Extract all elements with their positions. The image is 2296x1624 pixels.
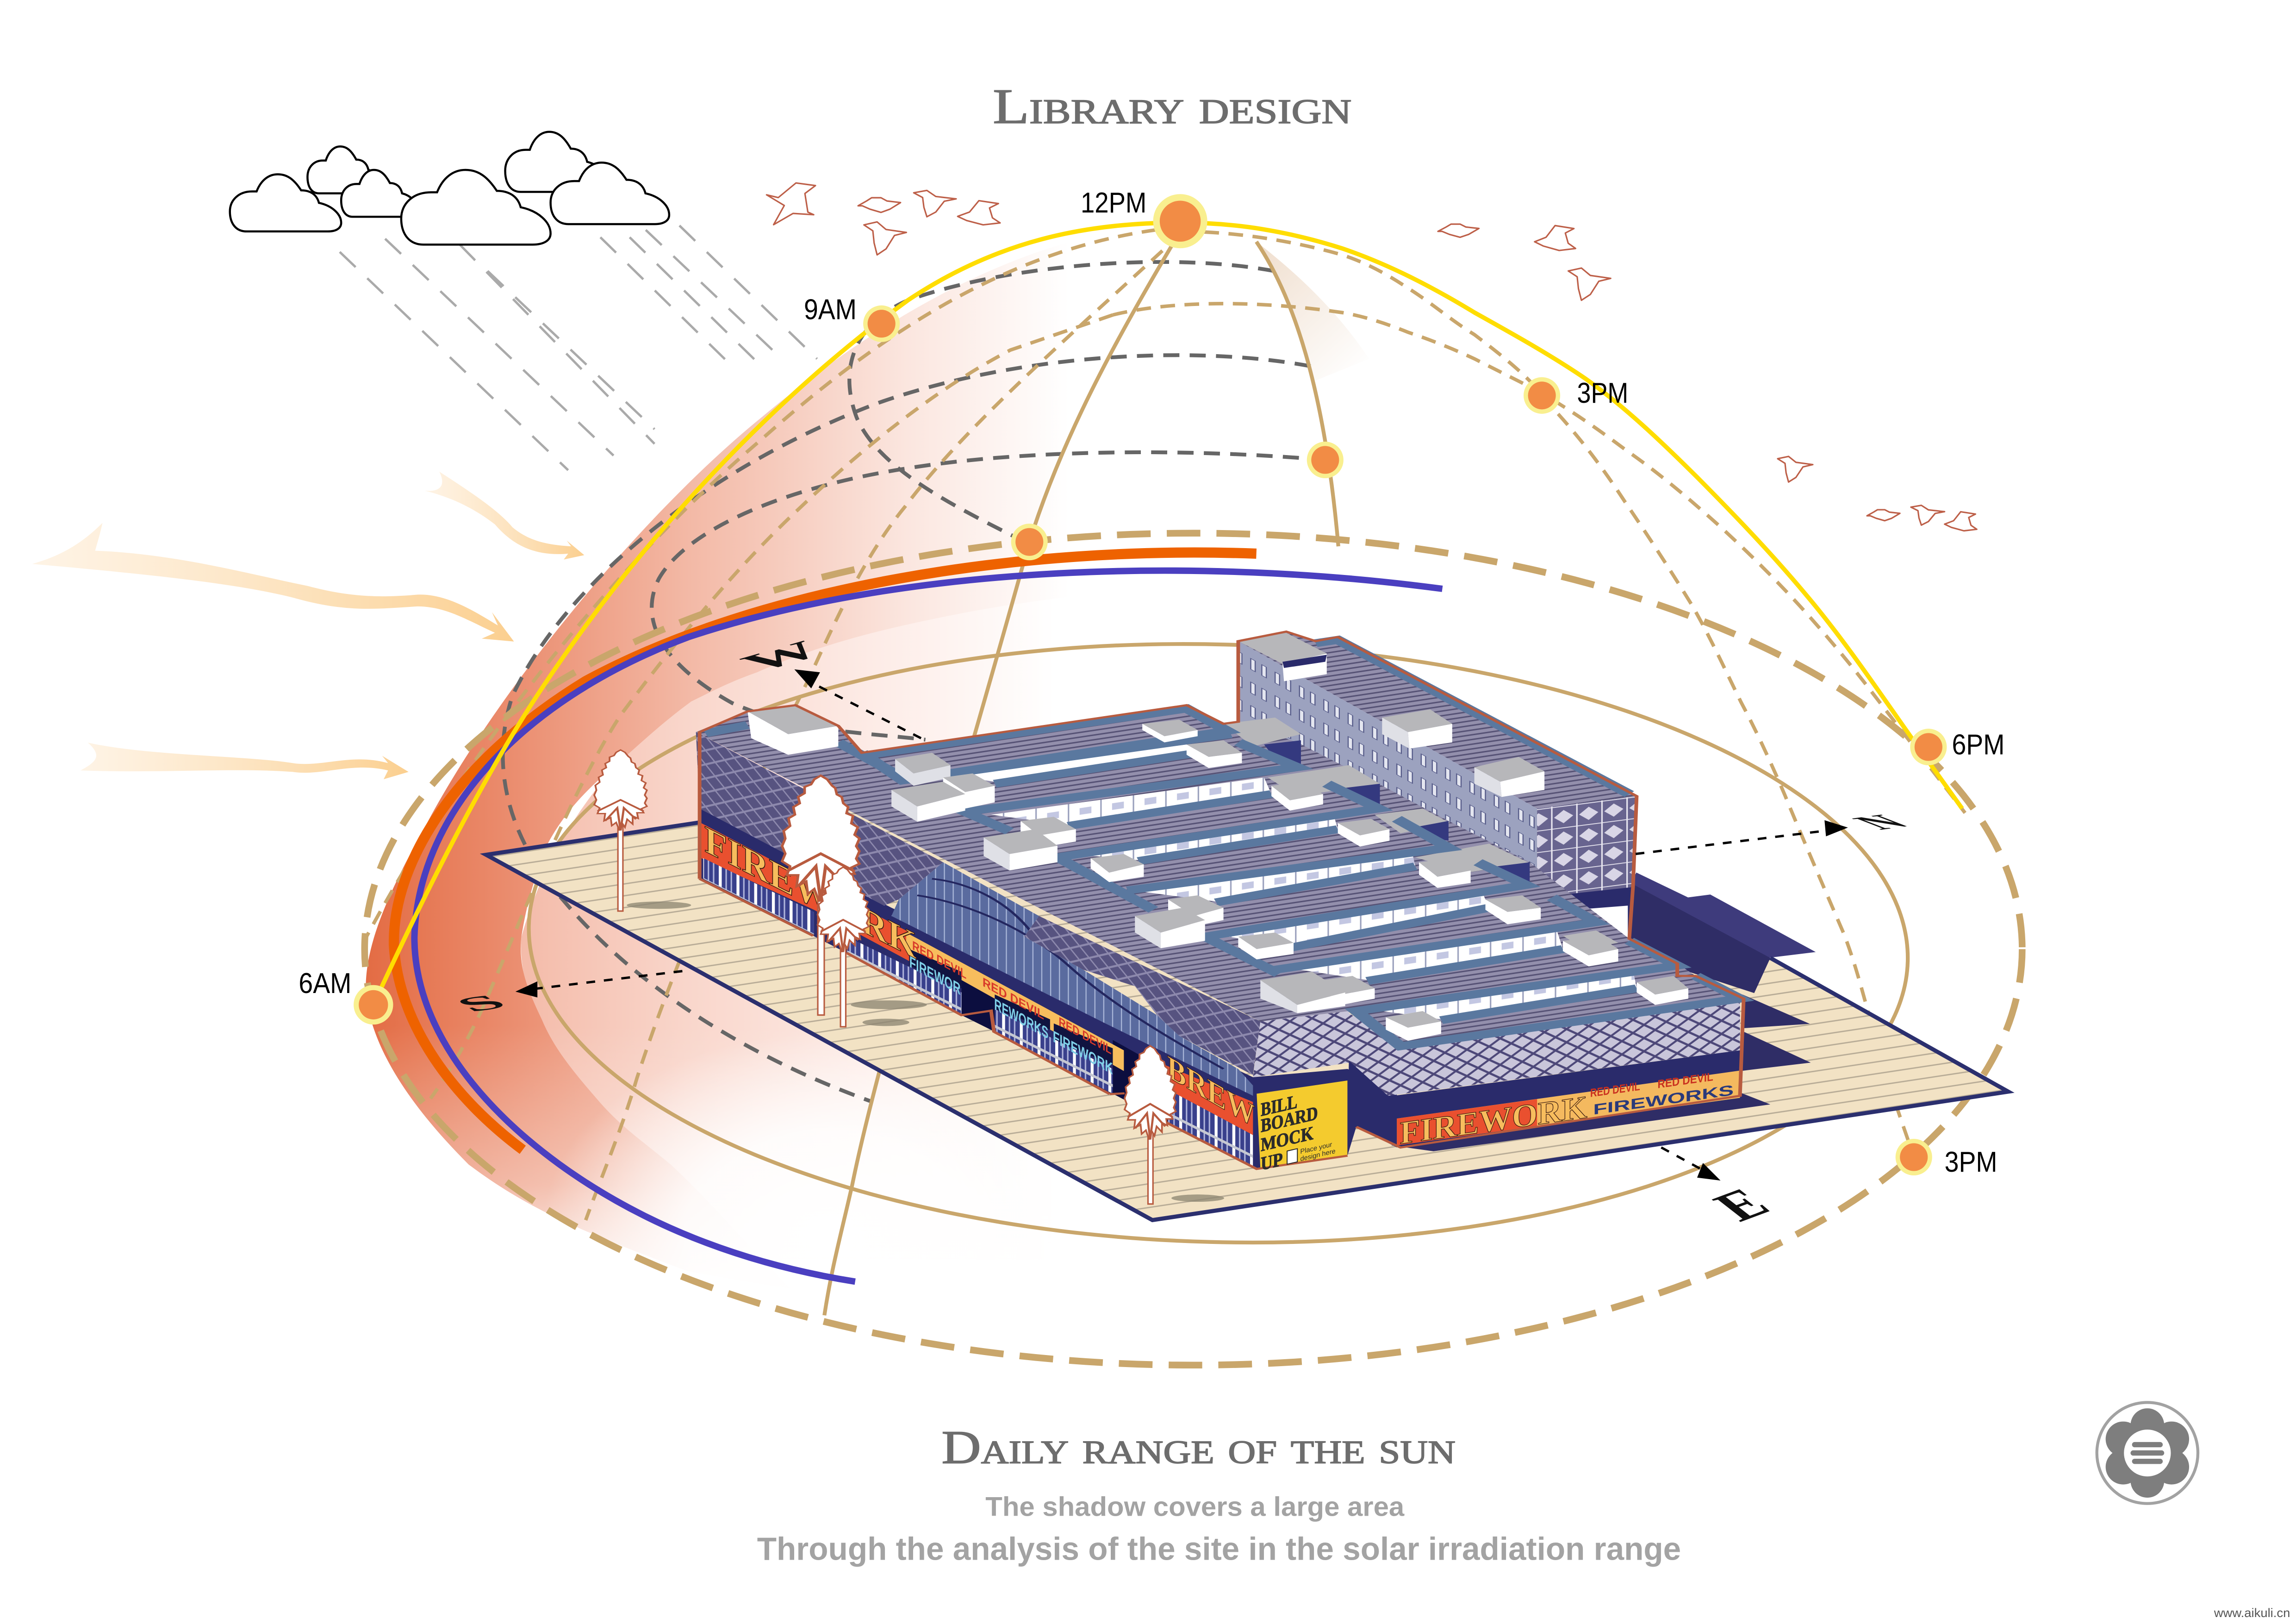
- tall block end screen: [1537, 796, 1636, 899]
- time labels: 12PM: [1081, 187, 1146, 219]
- time labels: 6AM: [299, 968, 351, 999]
- mural and sign lettering: FIREWORK: [704, 817, 917, 968]
- horizon dashed ellipse: [365, 533, 2022, 1365]
- site plate edges: [486, 823, 2008, 1220]
- billboard lettering: UP: [1261, 1149, 1283, 1175]
- mural and sign lettering: [704, 817, 1734, 1151]
- time labels: 9AM: [804, 294, 857, 326]
- under screen recess: [1537, 887, 1633, 939]
- rain: [340, 225, 817, 470]
- mural and sign lettering: FIREWOR: [909, 952, 961, 999]
- orange summer arc: [394, 552, 1257, 1150]
- time labels: 3PM: [1577, 377, 1628, 409]
- perforated screen corner: [1253, 1011, 1349, 1077]
- sun positions: [354, 194, 1947, 1175]
- ground orbit ellipse: [521, 626, 1916, 1260]
- perforated screen left: [696, 732, 943, 906]
- right end blue windows: [1264, 740, 1530, 884]
- time labels: 3PM: [1945, 1146, 1997, 1178]
- solid tan meridians: [824, 231, 1338, 1315]
- mural and sign lettering: RED DEVIL: [1590, 1080, 1640, 1100]
- mural and sign lettering: RED DEVIL: [1658, 1070, 1713, 1091]
- logo: [2097, 1402, 2198, 1504]
- mural and sign lettering: FIREWORKS: [1593, 1081, 1734, 1118]
- mural and sign lettering: REWORKS: [994, 994, 1048, 1043]
- rooftop boxes: [747, 633, 1688, 1041]
- time labels: 6PM: [1952, 729, 2004, 761]
- title: Library design: [993, 79, 1351, 134]
- beige fade at noon meridian: [1257, 242, 1369, 381]
- mural and sign lettering: FIREWORK: [1400, 1089, 1587, 1151]
- gray dashed sun paths: [503, 262, 1325, 1101]
- billboard lettering: [1261, 1082, 1336, 1175]
- tall block wall: [1238, 641, 1537, 887]
- billboard lettering: design here: [1300, 1148, 1336, 1163]
- wind arrows: [32, 472, 584, 779]
- billboard lettering: BOARD: [1261, 1103, 1318, 1137]
- subtitle: Daily range of the sun: [941, 1422, 1456, 1474]
- mural and sign lettering: RED DEVIL: [912, 938, 966, 982]
- blue winter arc: [414, 571, 1442, 1281]
- mural brew: [1164, 1065, 1253, 1135]
- tan dashed sun paths: [366, 227, 1965, 1220]
- billboard: [1257, 1081, 1347, 1168]
- yellow sun path: [373, 223, 1962, 1005]
- time labels: [299, 187, 2004, 1178]
- roof slit window rows: [951, 744, 1636, 1019]
- building: [696, 631, 1744, 1169]
- gray back wall pieces: [1224, 718, 1618, 949]
- facade gaps: [962, 966, 1168, 1123]
- compass north: N: [1841, 811, 1921, 834]
- radial fade of heat: [542, 1033, 1113, 1428]
- mural and sign lettering: FIREWORK: [1053, 1027, 1113, 1078]
- building cast shadows: [1391, 873, 1816, 1151]
- birds: [766, 183, 1977, 531]
- watermark: www.aikuli.cn: [2214, 1606, 2290, 1620]
- compass north: [1636, 811, 1921, 854]
- billboard lettering: MOCK: [1261, 1123, 1314, 1156]
- perforated screen centre: [1024, 916, 1260, 1075]
- mural and sign lettering: BREW: [1167, 1048, 1255, 1135]
- lower left facade base: [700, 808, 1397, 1169]
- brown outline: [700, 631, 1744, 1169]
- billboard lettering: BILL: [1261, 1091, 1297, 1121]
- right block perforated screen: [1349, 999, 1740, 1096]
- compass east: E: [1701, 1180, 1782, 1230]
- shopfront windows: [703, 858, 1253, 1168]
- tall block roof: [1238, 631, 1636, 808]
- compass west: W: [731, 636, 832, 677]
- right block lower facade: [1347, 1050, 1740, 1148]
- site plate: [486, 724, 2008, 1220]
- main roof: [696, 705, 1740, 1046]
- mural and sign lettering: RED DEVIL: [983, 975, 1044, 1023]
- compass south: [446, 971, 682, 1016]
- caption line two: Through the analysis of the site in the solar irradiation range: [757, 1531, 1681, 1567]
- clouds: [230, 132, 669, 244]
- billboard lettering: Place your: [1300, 1141, 1332, 1156]
- compass south: S: [446, 991, 516, 1016]
- roof parapet bands: [705, 640, 1740, 1046]
- blue canopy: [891, 862, 1253, 1096]
- mural and sign lettering: RED DEVIL: [1059, 1014, 1111, 1057]
- sun heat gradient crescent: [366, 223, 1288, 1289]
- trees: [594, 750, 1176, 1204]
- ground shadows of trees: [627, 901, 1224, 1202]
- pale sun heat inner field: [521, 586, 1069, 1260]
- sign band: [906, 932, 1124, 1071]
- compass east: [1661, 1148, 1782, 1230]
- compass west: [731, 636, 921, 738]
- caption line one: The shadow covers a large area: [985, 1492, 1405, 1522]
- mural fireworks left: [701, 823, 910, 962]
- bottom fade of heat: [344, 1025, 1106, 1304]
